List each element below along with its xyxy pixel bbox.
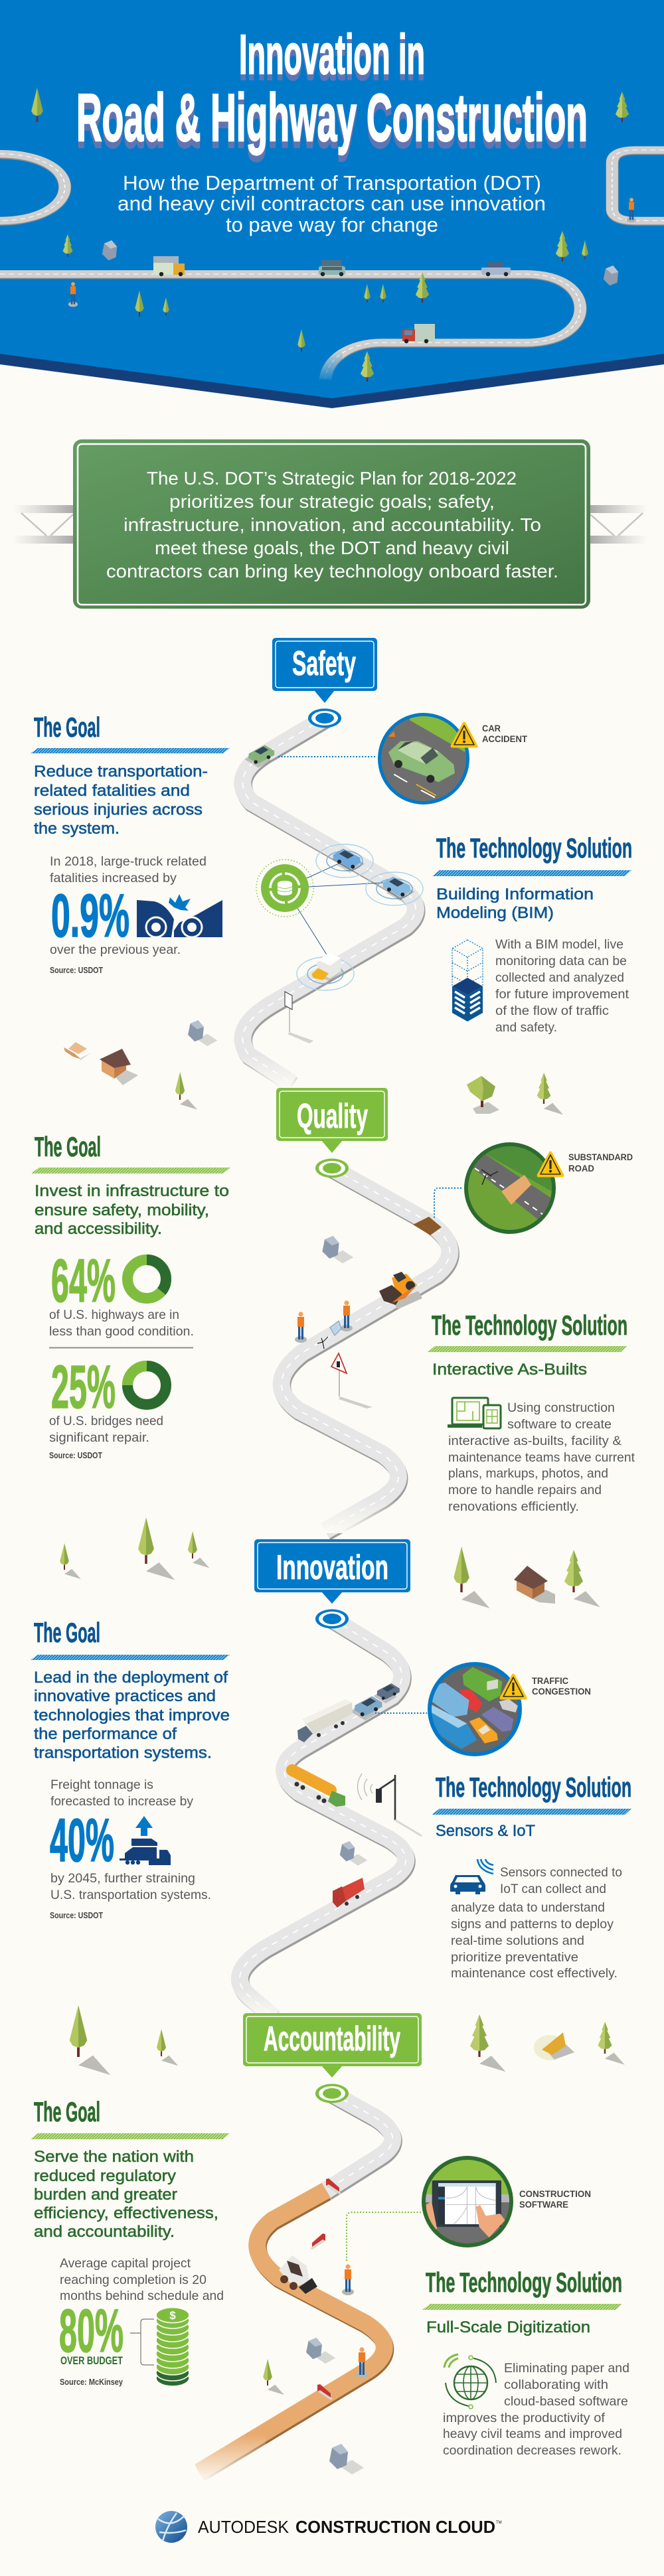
Safety sign: Safety xyxy=(292,644,356,683)
section: Innovation xyxy=(31,1517,631,2020)
technology text: coordination decreases rework. xyxy=(443,2443,622,2458)
warning icon xyxy=(452,723,476,746)
road start pin xyxy=(315,1609,349,1629)
pavement crack xyxy=(317,1337,328,1349)
callout label: CONGESTION xyxy=(532,1687,591,1697)
goal text: the system. xyxy=(34,820,120,838)
BIM hub xyxy=(256,860,313,917)
camper vehicle xyxy=(153,256,185,276)
icon: coin stack xyxy=(156,2307,189,2386)
footer logo xyxy=(155,2511,502,2543)
title line 1: Innovation in xyxy=(239,23,425,86)
stat outro: over the previous year. xyxy=(50,943,181,957)
section: Quality xyxy=(31,1088,635,1533)
sensor links xyxy=(285,861,394,958)
callout label: CONSTRUCTION xyxy=(519,2189,591,2199)
sensor rings xyxy=(297,844,423,990)
goal heading: The Goal xyxy=(34,2096,100,2127)
stat caption: OVER BUDGET xyxy=(60,2354,123,2367)
right road loop xyxy=(612,150,664,222)
technology name xyxy=(436,885,594,922)
van xyxy=(319,260,345,276)
icon: freight trucks with arrow xyxy=(120,1816,171,1865)
scenery: picnic table xyxy=(64,1042,91,1061)
callout circle: traffic congestion xyxy=(428,1662,522,1756)
green car on road xyxy=(244,745,274,768)
Innovation sign xyxy=(254,1539,410,1604)
warning icon xyxy=(501,1675,525,1698)
callout label: TRAFFIC xyxy=(532,1676,568,1686)
subtitle: and heavy civil contractors can use innovation xyxy=(118,192,546,215)
overhead sign supports xyxy=(13,505,647,544)
stat text: of U.S. highways are in xyxy=(49,1308,179,1322)
callout label: ACCIDENT xyxy=(482,734,528,744)
technology text: renovations efficiently. xyxy=(448,1499,579,1514)
banner blue field xyxy=(0,0,664,398)
skid steer loader xyxy=(279,2255,317,2294)
road start pin xyxy=(315,2084,349,2103)
road start pin xyxy=(315,1159,349,1177)
subtitle xyxy=(118,171,546,236)
vehicle: red dump truck xyxy=(333,1878,365,1908)
technology name: Sensors & IoT xyxy=(436,1822,535,1840)
subtitle: to pave way for change xyxy=(226,213,438,236)
logo mark xyxy=(155,2511,187,2543)
road barrier markers xyxy=(310,2178,341,2400)
callout circle: construction software xyxy=(422,2156,513,2247)
technology name: Modeling (BIM) xyxy=(436,904,554,922)
intro text xyxy=(106,468,558,581)
callout label: CAR xyxy=(482,723,501,733)
road fade xyxy=(179,2435,266,2482)
subtitle: How the Department of Transportation (DOT) xyxy=(123,171,541,194)
technology text: analyze data to understand xyxy=(451,1900,605,1915)
technology text: plans, markups, photos, and xyxy=(448,1466,608,1481)
goal text: burden and greater xyxy=(34,2186,177,2204)
Innovation sign: Innovation xyxy=(276,1549,388,1587)
goal text: innovative practices and xyxy=(34,1687,216,1705)
rock xyxy=(340,1841,367,1866)
main winding road xyxy=(0,274,580,380)
accountability road dirt xyxy=(199,2190,385,2474)
callout label xyxy=(532,1676,591,1697)
blue cars xyxy=(333,849,414,901)
road start pin xyxy=(308,709,341,727)
scenery: house xyxy=(514,1566,555,1604)
goal text: reduced regulatory xyxy=(34,2167,176,2185)
goal heading: The Goal xyxy=(34,712,100,743)
stat intro: months behind schedule and xyxy=(60,2289,224,2303)
technology text: real-time solutions and xyxy=(451,1933,584,1948)
technology text: Sensors connected to xyxy=(500,1865,622,1880)
technology text xyxy=(448,1401,635,1514)
title line 1 shadow: Innovation in xyxy=(239,29,425,92)
technology text xyxy=(443,2361,629,2458)
technology text: and safety. xyxy=(495,1020,557,1035)
stat text xyxy=(49,1414,163,1445)
innovation road xyxy=(240,1619,407,2018)
icon: laptop and tablet xyxy=(448,1398,501,1428)
technology name: Interactive As-Builts xyxy=(432,1361,587,1379)
technology text: collected and analyzed xyxy=(495,970,624,985)
stat intro: fatalities increased by xyxy=(50,871,177,885)
goal rule xyxy=(31,2133,230,2139)
header trees xyxy=(31,88,629,382)
dotted connector xyxy=(278,756,375,757)
stat intro xyxy=(60,2256,224,2303)
icon: connected car xyxy=(450,1859,493,1894)
stat text: significant repair. xyxy=(49,1430,149,1445)
goal text: Invest in infrastructure to xyxy=(35,1182,229,1200)
icon: car crash xyxy=(137,894,222,937)
rock xyxy=(322,1236,353,1263)
sedan xyxy=(481,262,511,276)
dotted connector xyxy=(434,1188,461,1218)
icon: coin stack: $ xyxy=(169,2309,176,2322)
goal rule xyxy=(31,1655,230,1660)
stat outro xyxy=(50,1871,211,1902)
section: Accountability xyxy=(31,2005,629,2482)
logo wordmark bold: CONSTRUCTION CLOUD xyxy=(295,2517,495,2537)
stat intro: Freight tonnage is xyxy=(50,1778,153,1792)
stat intro xyxy=(50,1778,193,1809)
goal text xyxy=(34,1669,230,1762)
intro text: infrastructure, innovation, and accountability. To xyxy=(124,514,541,535)
goal text xyxy=(35,1182,229,1238)
callout circle: car accident xyxy=(378,713,469,804)
technology text: monitoring data can be xyxy=(495,954,627,968)
callout label xyxy=(482,723,528,744)
workers xyxy=(342,2264,368,2378)
scenery: tent xyxy=(534,2032,574,2060)
intro text: The U.S. DOT’s Strategic Plan for 2018-2022 xyxy=(147,468,517,489)
road fade xyxy=(226,1055,312,1089)
callout label: SOFTWARE xyxy=(519,2200,568,2210)
quality road xyxy=(282,1168,451,1533)
stat intro: reaching completion is 20 xyxy=(60,2273,207,2287)
intro text: prioritizes four strategic goals; safety, xyxy=(169,491,495,512)
warning icon xyxy=(539,1153,562,1175)
technology text: for future improvement xyxy=(495,987,629,1002)
icon: cloud globe xyxy=(444,2354,496,2409)
technology name: Full-Scale Digitization xyxy=(426,2318,590,2336)
header rocks xyxy=(102,240,618,285)
technology name: Building Information xyxy=(436,885,594,903)
technology text: more to handle repairs and xyxy=(448,1483,602,1497)
source: Source: USDOT xyxy=(49,1450,102,1460)
traffic signal xyxy=(357,1774,422,1836)
road fade xyxy=(312,1499,405,1533)
technology text: maintenance teams have current xyxy=(448,1450,635,1465)
vehicle: tanker truck xyxy=(292,1770,345,1807)
stat intro: In 2018, large-truck related xyxy=(50,854,207,869)
stat intro xyxy=(50,854,207,885)
technology rule xyxy=(422,2304,622,2310)
dotted connector xyxy=(347,2212,421,2262)
technology text: interactive as-builts, facility & xyxy=(448,1434,622,1448)
Quality sign: Quality xyxy=(297,1097,368,1136)
callout label: ROAD xyxy=(568,1164,594,1174)
goal text: Lead in the deployment of xyxy=(34,1669,228,1687)
safety road xyxy=(242,718,417,1085)
header banner xyxy=(0,0,664,408)
stat 25%: 25% xyxy=(51,1353,116,1421)
damaged road patch xyxy=(413,1217,442,1235)
source: Source: USDOT xyxy=(50,1910,103,1920)
technology text: cloud-based software xyxy=(504,2394,628,2409)
scenery: house xyxy=(100,1049,138,1085)
goal text: and accessibility. xyxy=(35,1220,162,1238)
technology text: improves the productivity of xyxy=(443,2411,606,2425)
donut 64% xyxy=(127,1260,166,1298)
goal text xyxy=(34,2148,218,2241)
source: Source: USDOT xyxy=(50,965,103,975)
goal text: Reduce transportation- xyxy=(34,763,208,781)
road workers xyxy=(295,1300,353,1343)
title line 1 shadow xyxy=(239,27,425,92)
goal rule xyxy=(31,748,230,753)
left road loop xyxy=(0,154,65,222)
donut 25% xyxy=(127,1366,166,1404)
bracket xyxy=(130,2319,154,2365)
stat 0.9%: 0.9% xyxy=(51,882,129,950)
section: Safety xyxy=(31,638,632,1114)
camper truck xyxy=(311,952,343,981)
trademark: TM xyxy=(496,2521,502,2525)
box truck xyxy=(402,324,435,343)
stat outro: by 2045, further straining xyxy=(50,1871,195,1886)
dotted connector xyxy=(375,1712,427,1714)
stat 40%: 40% xyxy=(50,1807,114,1874)
title line 1 shadow: Innovation in xyxy=(239,27,425,89)
technology text: collaborating with xyxy=(504,2378,608,2392)
surveyors xyxy=(68,198,636,307)
stat intro: forecasted to increase by xyxy=(50,1794,193,1809)
header roads xyxy=(0,150,664,380)
technology text: of the flow of traffic xyxy=(495,1004,609,1018)
technology text: prioritize preventative xyxy=(451,1950,578,1965)
technology text: With a BIM model, live xyxy=(495,937,623,952)
scenery: trees xyxy=(70,2005,625,2395)
goal text: and accountability. xyxy=(34,2223,175,2241)
technology text: software to create xyxy=(507,1417,612,1432)
technology text: Eliminating paper and xyxy=(504,2361,629,2376)
technology text xyxy=(495,937,629,1035)
vehicle: cars on road xyxy=(351,1683,400,1720)
speed limit sign xyxy=(285,992,313,1043)
technology text: maintenance cost effectively. xyxy=(451,1966,618,1981)
logo wordmark: AUTODESK xyxy=(198,2517,290,2537)
callout label xyxy=(568,1152,633,1174)
banner dark edge xyxy=(0,0,664,408)
stat 64%: 64% xyxy=(51,1247,116,1315)
stat text: less than good condition. xyxy=(49,1324,194,1339)
Accountability sign: Accountability xyxy=(264,2020,400,2058)
technology rule xyxy=(432,870,631,876)
technology text: signs and patterns to deploy xyxy=(451,1917,614,1932)
goal text: ensure safety, mobility, xyxy=(35,1201,209,1219)
vehicle: white semi truck xyxy=(297,1699,353,1742)
technology text: heavy civil teams and improved xyxy=(443,2427,622,2441)
rocks xyxy=(306,2338,364,2474)
stat 80%: 80% xyxy=(59,2297,124,2365)
stat outro: U.S. transportation systems. xyxy=(50,1888,211,1902)
scenery: rock xyxy=(188,1020,217,1046)
scenery: trees xyxy=(175,1072,563,1114)
icon: BIM building xyxy=(452,940,483,1022)
technology text xyxy=(451,1865,622,1981)
goal heading: The Goal xyxy=(35,1131,101,1162)
road works sign xyxy=(331,1353,373,1408)
stat text: of U.S. bridges need xyxy=(49,1414,163,1428)
goal text xyxy=(34,763,208,838)
intro text: contractors can bring key technology onboard faster. xyxy=(106,561,558,581)
technology rule xyxy=(428,1346,627,1352)
road fade xyxy=(226,1988,292,2020)
goal text: technologies that improve xyxy=(34,1706,230,1724)
stat text xyxy=(49,1308,194,1339)
Safety sign xyxy=(272,638,377,703)
goal text: related fatalities and xyxy=(34,782,190,800)
stat intro: Average capital project xyxy=(60,2256,191,2271)
road fade xyxy=(312,350,343,384)
Quality sign xyxy=(276,1088,388,1153)
callout label: SUBSTANDARD xyxy=(568,1152,633,1162)
scenery: trees xyxy=(60,1517,600,1608)
goal text: the performance of xyxy=(34,1725,177,1743)
goal heading: The Goal xyxy=(34,1617,100,1648)
technology rule xyxy=(432,1809,631,1815)
technology text: IoT can collect and xyxy=(500,1882,606,1896)
road roller xyxy=(379,1272,422,1309)
technology text: Using construction xyxy=(507,1401,615,1415)
goal rule xyxy=(31,1168,230,1174)
goal text: Serve the nation with xyxy=(34,2148,194,2166)
goal text: efficiency, effectiveness, xyxy=(34,2204,218,2222)
green intro highway sign xyxy=(73,439,590,609)
callout circle: substandard road xyxy=(464,1142,561,1235)
source: Source: McKinsey xyxy=(60,2377,124,2387)
goal text: transportation systems. xyxy=(34,1744,212,1762)
callout label xyxy=(519,2189,591,2210)
intro text: meet these goals, the DOT and heavy civil xyxy=(155,538,509,558)
goal text: serious injuries across xyxy=(34,800,203,819)
Accountability sign xyxy=(243,2013,422,2078)
accountability road paved xyxy=(326,2093,394,2192)
